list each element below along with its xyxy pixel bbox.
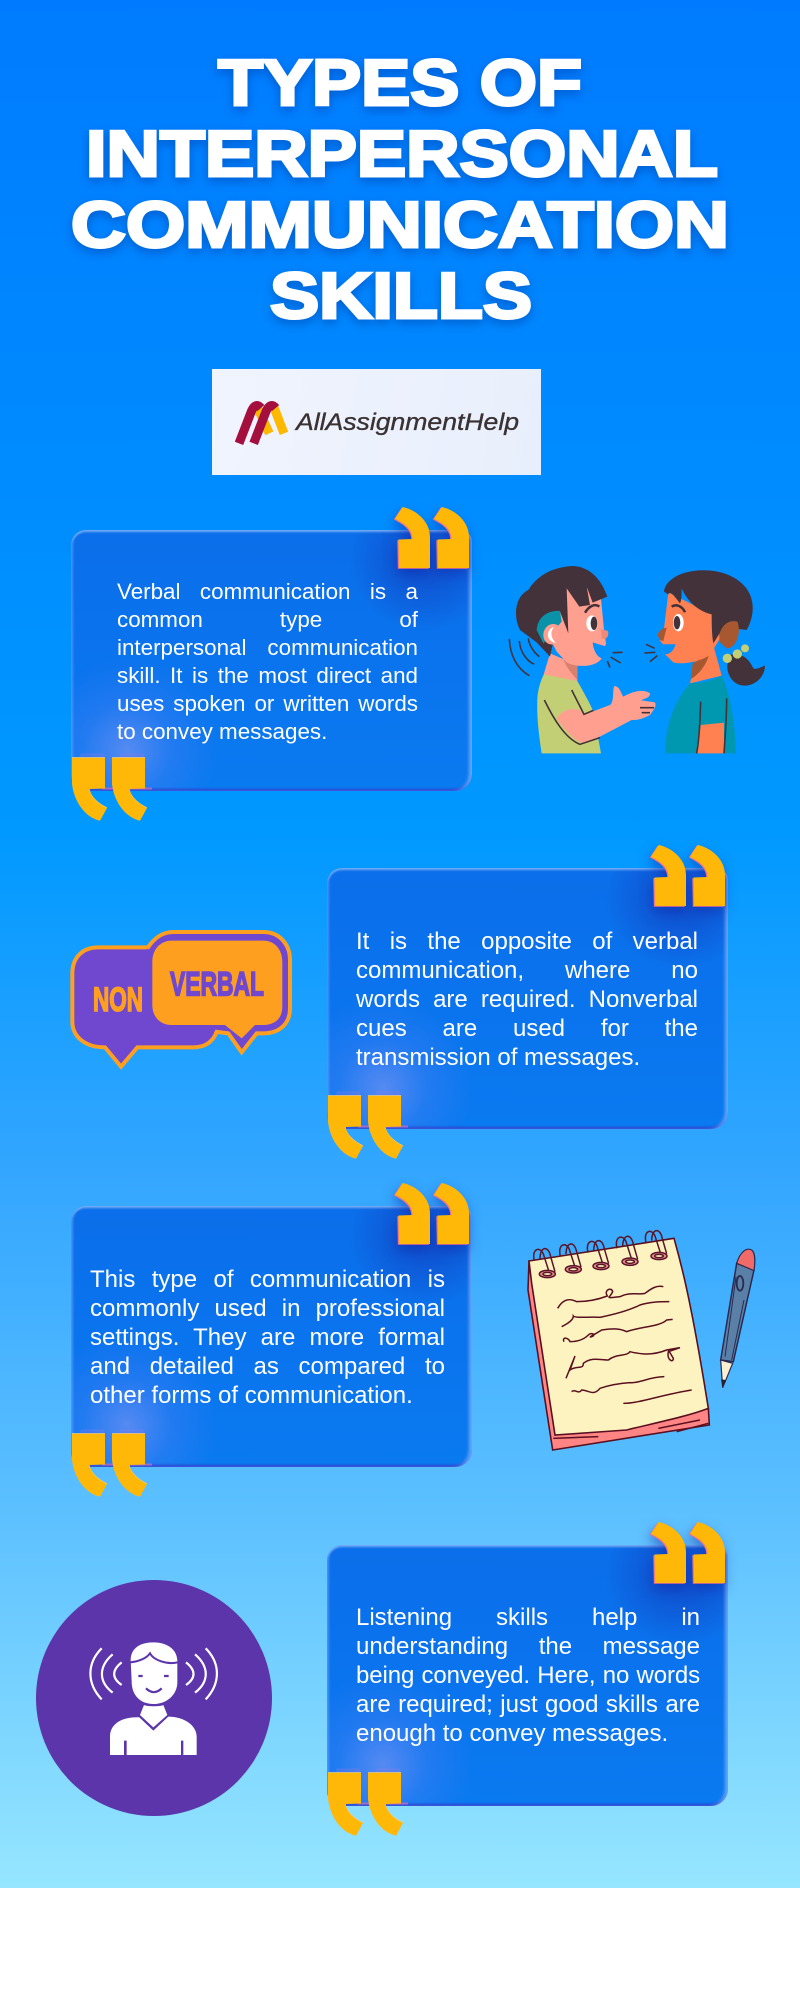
closing quote mark [646, 845, 730, 916]
icon: non verbal speech bubbles [70, 930, 292, 1070]
listening description text: enough to convey messages. [356, 1720, 668, 1747]
nonverbal description text: communication, where no [356, 957, 698, 984]
scrunchie [723, 644, 749, 663]
nonverbal description text [356, 928, 698, 1071]
verbal description text: interpersonal communication [117, 635, 418, 660]
verbal description text: skill. It is the most direct and [117, 663, 418, 688]
title: SKILLS [270, 260, 532, 332]
boy arm [557, 686, 656, 743]
hair line [130, 1653, 178, 1663]
pencil details [737, 1276, 743, 1291]
panel: nonverbal communication [327, 845, 730, 1159]
logo wordmark: AllAssignmentHelp [294, 409, 519, 436]
illustration: notepad and pencil [527, 1230, 756, 1451]
closing quote mark [645, 1522, 732, 1593]
panel: listening skills [327, 1522, 732, 1836]
sound waves [509, 638, 657, 676]
spiral rings [534, 1231, 667, 1278]
card background [71, 1206, 472, 1467]
listening description text: understanding the message [356, 1633, 700, 1660]
nonverbal description text: It is the opposite of verbal [356, 928, 698, 955]
boy face [550, 588, 606, 666]
verbal description text: common type of [117, 607, 418, 632]
opening quote mark [72, 1430, 152, 1497]
person with sound waves [89, 1642, 218, 1755]
label NON: NON [93, 981, 143, 1019]
boy ear [543, 624, 561, 645]
front bubble inner [152, 941, 282, 1038]
panel: verbal communication [71, 507, 474, 821]
label VERBAL: VERBAL [170, 966, 264, 1004]
written description text: other forms of communication. [90, 1382, 413, 1409]
card background [71, 530, 472, 791]
pencil body [721, 1263, 754, 1362]
nonverbal description text: cues are used for the [356, 1015, 698, 1042]
nonverbal description text: transmission of messages. [356, 1044, 640, 1071]
closing quote mark [390, 507, 474, 578]
written description text [90, 1266, 445, 1409]
girl ear [719, 621, 739, 648]
girl eye and brow [673, 614, 684, 631]
boy nose [601, 629, 608, 639]
title: INTERPERSONAL [86, 118, 718, 190]
boy hair [516, 566, 607, 657]
girl shirt [665, 676, 736, 753]
opening quote mark [72, 754, 152, 821]
title [68, 47, 730, 332]
person neck [140, 1705, 167, 1727]
boy outline strokes [544, 690, 654, 744]
logo card [212, 369, 541, 475]
title: COMMUNICATION [71, 189, 729, 261]
girl nose [658, 628, 667, 641]
front bubble fill [147, 932, 290, 1052]
scribbled lines [553, 1286, 708, 1438]
title: TYPES OF [218, 47, 582, 119]
verbal description text: uses spoken or written words [117, 691, 418, 716]
card background [327, 1545, 728, 1806]
notepad red edge [528, 1262, 709, 1450]
girl neck [690, 645, 722, 683]
girl mouth [663, 644, 676, 654]
front bubble outline [147, 932, 290, 1052]
nonverbal description text: words are required. Nonverbal [356, 986, 698, 1013]
boy hearing aid [537, 611, 562, 643]
girl hair [664, 570, 753, 643]
pencil eraser [737, 1249, 755, 1271]
sound waves left [90, 1648, 122, 1699]
icon: listening person in purple circle [36, 1580, 272, 1816]
listening description text: are required; just good skills are [356, 1691, 700, 1718]
back bubble [72, 947, 217, 1067]
verbal description text [117, 579, 418, 744]
pencil tip [721, 1360, 733, 1388]
opening quote mark [328, 1768, 408, 1836]
verbal description text: to convey messages. [117, 719, 327, 744]
notepad page [529, 1238, 708, 1435]
person head [131, 1642, 177, 1704]
opening quote mark [328, 1092, 408, 1159]
closing quote mark [390, 1183, 475, 1254]
eyes and smile [138, 1676, 169, 1692]
boy neck [543, 653, 577, 682]
listening description text: being conveyed. Here, no words [356, 1662, 700, 1689]
girl arm [697, 723, 724, 753]
person body [110, 1717, 197, 1755]
logo mark [239, 406, 284, 443]
boy mouth [593, 642, 607, 658]
sound waves right [186, 1648, 217, 1699]
boy shirt [537, 674, 601, 753]
written description text: and detailed as compared to [90, 1353, 445, 1380]
listening description text: Listening skills help in [356, 1604, 700, 1631]
girl face [660, 592, 720, 663]
boy eye and brow [586, 615, 598, 631]
pink ring shadows [537, 1245, 669, 1277]
written description text: This type of communication is [90, 1266, 445, 1293]
verbal description text: Verbal communication is a [117, 579, 418, 604]
card background [327, 868, 728, 1129]
written description text: settings. They are more formal [90, 1324, 445, 1351]
listening description text [356, 1604, 700, 1747]
girl ponytail [727, 654, 765, 686]
illustration: two kids talking [508, 566, 765, 754]
panel: written communication [71, 1183, 475, 1497]
written description text: commonly used in professional [90, 1295, 445, 1322]
